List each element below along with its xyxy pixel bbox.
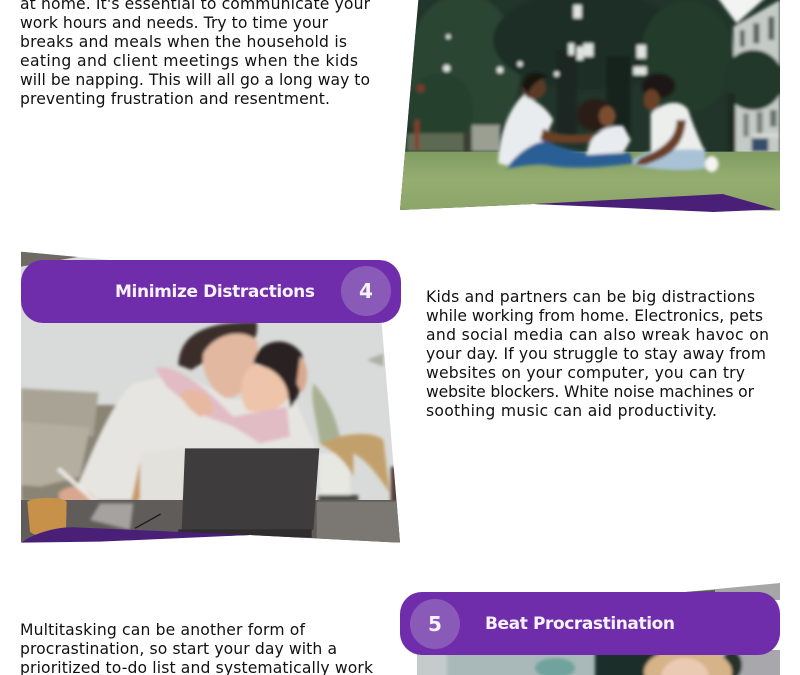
banner: Beat Procrastination: Beat Procrastination (485, 614, 675, 634)
text block: minimize distractions: websites on your computer, you can try (426, 364, 745, 382)
text block: communicate with household: preventing frustration and resentment. (20, 90, 330, 108)
accent: purple ribbon (22, 527, 250, 543)
text block: minimize distractions: and social media can also wreak havoc on (426, 326, 769, 344)
photo: family sitting on grass (400, 0, 783, 213)
number badge 5 (410, 599, 460, 649)
adults and child, painted roughly (507, 141, 633, 168)
text block: communicate with household: will be napping. This will all go a long way to (20, 71, 370, 89)
text block: minimize distractions: while working from home. Electronics, pets (426, 307, 763, 325)
banner: Minimize Distractions (21, 260, 401, 323)
text block: minimize distractions: website blockers. White noise machines or (426, 383, 755, 401)
text block: minimize distractions (426, 288, 769, 420)
number badge 4 (341, 266, 391, 316)
banner: Minimize Distractions: 4 (359, 279, 373, 303)
banner: Beat Procrastination: 5 (428, 612, 442, 636)
text block: communicate with household: eating and client meetings when the kids (20, 52, 358, 70)
text block: minimize distractions: soothing music can aid productivity. (426, 402, 717, 420)
banner: Minimize Distractions: Minimize Distractions (115, 282, 315, 302)
text block: communicate with household: breaks and meals when the household is (20, 33, 347, 51)
photo: woman at desk, partly visible (410, 583, 785, 675)
accent: purple ribbon (533, 194, 777, 212)
text block: communicate with household (20, 0, 371, 108)
text block: beat procrastination: procrastination, so start your day with a (20, 640, 337, 658)
text block: communicate with household: work hours and needs. Try to time your (20, 14, 329, 32)
text block: minimize distractions: Kids and partners can be big distractions (426, 288, 755, 306)
text block: minimize distractions: your day. If you struggle to stay away from (426, 345, 766, 363)
banner: Beat Procrastination (400, 592, 780, 655)
text block: beat procrastination: Multitasking can be another form of (20, 621, 306, 639)
text block: beat procrastination (20, 621, 373, 675)
photo: mother hugged by daughter at laptop (21, 250, 401, 543)
